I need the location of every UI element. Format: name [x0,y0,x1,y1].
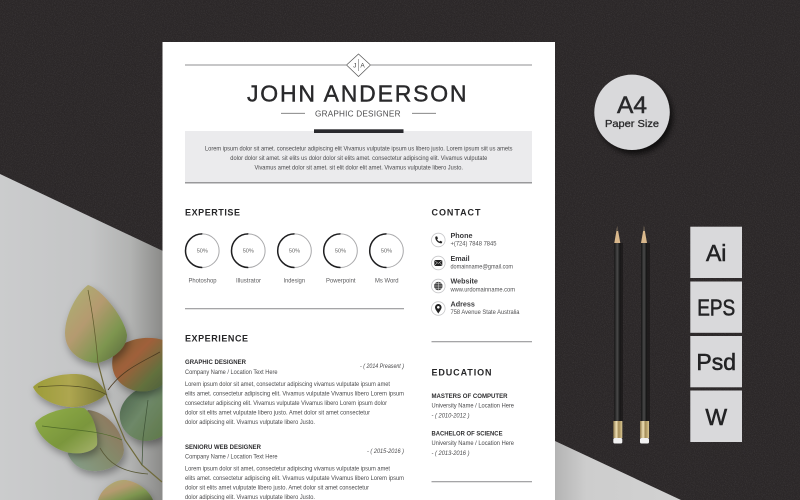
degree: masters: University Name / Location Here [432,403,514,410]
leaf: dark green right [120,382,163,441]
contact: address: Adress [450,300,475,308]
format badge: Ai [690,227,742,278]
leaf: top green and tan [65,285,127,363]
contact: website [432,276,515,294]
skill: Photoshop [186,234,219,285]
job: graphic designer: Company Name / Location Text Here [185,369,278,376]
job: graphic designer: elits amet. consectetur adipiscing elit. Vivamus vulputate Vivamus libero Lorem ipsum [185,390,404,397]
format badge: EPS: EPS [697,295,735,321]
format badge: Psd [690,336,742,387]
summary box: Lorem ipsum dolor sit amet. consectetur adipiscing elit Vivamus vulputate ipsum us libero justo. Lorem ipsum siit us amets [205,145,513,152]
skill: Illustrator: 50% [243,249,254,255]
badge: A4 paper size: Paper Size [605,118,659,130]
grey diagonal panel: lower right [555,441,681,500]
contact: email: Email [450,254,470,263]
job: graphic designer [185,359,404,426]
eucalyptus branch with leaves [33,285,163,500]
badge: A4 paper size [594,75,670,150]
skill: Illustrator: Illustrator [236,278,262,285]
section: contact [432,208,520,316]
format badge: Psd: Psd [696,349,736,375]
job: senior web designer: elits amet. consectetur adipiscing elit. Vivamus vulputate Vivamus libero Lorem ipsum [185,475,404,482]
job: senior web designer: - ( 2015-2016 ) [367,448,404,455]
skill: Ms Word: 50% [381,249,392,255]
header rule with monogram: J [353,62,356,70]
grey diagonal panel: lower left [0,174,163,500]
contact: phone: +(724) 7848 7845 [450,241,497,248]
summary box [185,129,532,184]
skill: Powerpoint: Powerpoint [326,278,356,285]
heading: expertise: EXPERTISE [185,208,240,218]
header [185,54,532,118]
badge: A4 paper size: A4 [617,92,647,119]
summary box: Vivamus amet dolor sit amet. sit elit dolor elit amet. Vivamus vulputate libero Justo. [254,164,463,171]
leaf: grey-green lower [68,410,124,471]
skill: Indesign [278,234,311,285]
leaf: bottom [98,480,153,500]
job: senior web designer: SENIORU WEB DESIGNER [185,444,261,451]
header rule with monogram: A [360,62,365,70]
job: graphic designer: dolor sit elits amet vulputate libero justo. Amet dolor sit amet consectetur [185,410,371,416]
contact: address: 758 Avenue State Australia [450,309,520,316]
degree: masters: MASTERS OF COMPUTER [432,393,508,400]
skill: Indesign: Indesign [284,278,305,285]
job: graphic designer: consectetur adipiscing elit. Vivamus vulputate Vivamus libero Lorem ipsum dolor [185,400,388,407]
skill: Photoshop: 50% [197,249,208,255]
job: senior web designer: dolor sit elits amet vulputate libero justo. Amet dolor sit amet consectetur [185,485,370,492]
contact: phone [432,231,497,248]
job: senior web designer [185,444,404,500]
format badge: Ai: Ai [706,240,726,266]
skill: Indesign: 50% [289,249,300,255]
skill: Photoshop: Photoshop [188,278,217,285]
job: graphic designer: Lorem ipsum dolor sit amet, consectetur adipiscing vivamus vulputate ipsum amet [185,381,390,388]
degree: bachelor: - ( 2013-2016 ) [432,450,470,457]
job: senior web designer: Company Name / Location Text Here [185,454,278,460]
leaf: orange olive right [112,338,163,392]
name: JOHN ANDERSON [247,80,466,106]
resume paper [162,42,555,500]
degree: bachelor: BACHELOR OF SCIENCE [432,430,503,438]
heading: education: EDUCATION [432,368,492,378]
skill: Ms Word: Ms Word [375,278,399,285]
contact: email [432,254,513,270]
job: senior web designer: Lorem ipsum dolor sit amet, consectetur adipiscing vivamus vulputate ipsum amet [185,466,390,473]
pencil: left [613,226,623,444]
skill: Powerpoint: 50% [335,249,346,255]
contact: address [432,300,520,316]
heading: experience: EXPERIENCE [185,334,248,344]
contact: phone: Phone [450,231,472,240]
heading: contact: CONTACT [432,208,481,218]
format badge: EPS [690,282,742,333]
job: graphic designer: GRAPHIC DESIGNER [185,359,246,366]
section: education [432,368,514,457]
contact: website: Website [450,276,478,286]
skill: Illustrator [232,234,265,285]
job: graphic designer: - ( 2014 Preasent ) [360,363,404,370]
job: graphic designer: dolor adipiscing elit. Vivamus vulputate libero Justo. [185,419,315,426]
section: experience [185,334,404,500]
skill: Powerpoint [324,234,357,285]
stems and veins [38,290,162,482]
header rule with monogram [185,54,532,76]
contact: email: domainname@gmail.com [450,264,513,270]
format badge: W [690,390,742,442]
format badge: W: W [705,404,727,430]
degree: masters [432,393,514,419]
skill: Ms Word [370,234,403,285]
job title: GRAPHIC DESIGNER [315,109,401,118]
leaf: yellow [33,374,106,407]
degree: bachelor [432,430,514,457]
summary box: dolor dolor sit amet. sit elits us dolor dolor sit elits amet. consectetur adipiscing elit. Vivamus vulputate [230,155,487,162]
leaf: bright green [35,408,97,453]
section: expertise [185,208,403,285]
degree: bachelor: University Name / Location Here [432,440,514,447]
contact: website: www.urdomainname.com [450,286,515,294]
degree: masters: - ( 2010-2012 ) [432,412,470,419]
pencil: right [640,226,650,444]
